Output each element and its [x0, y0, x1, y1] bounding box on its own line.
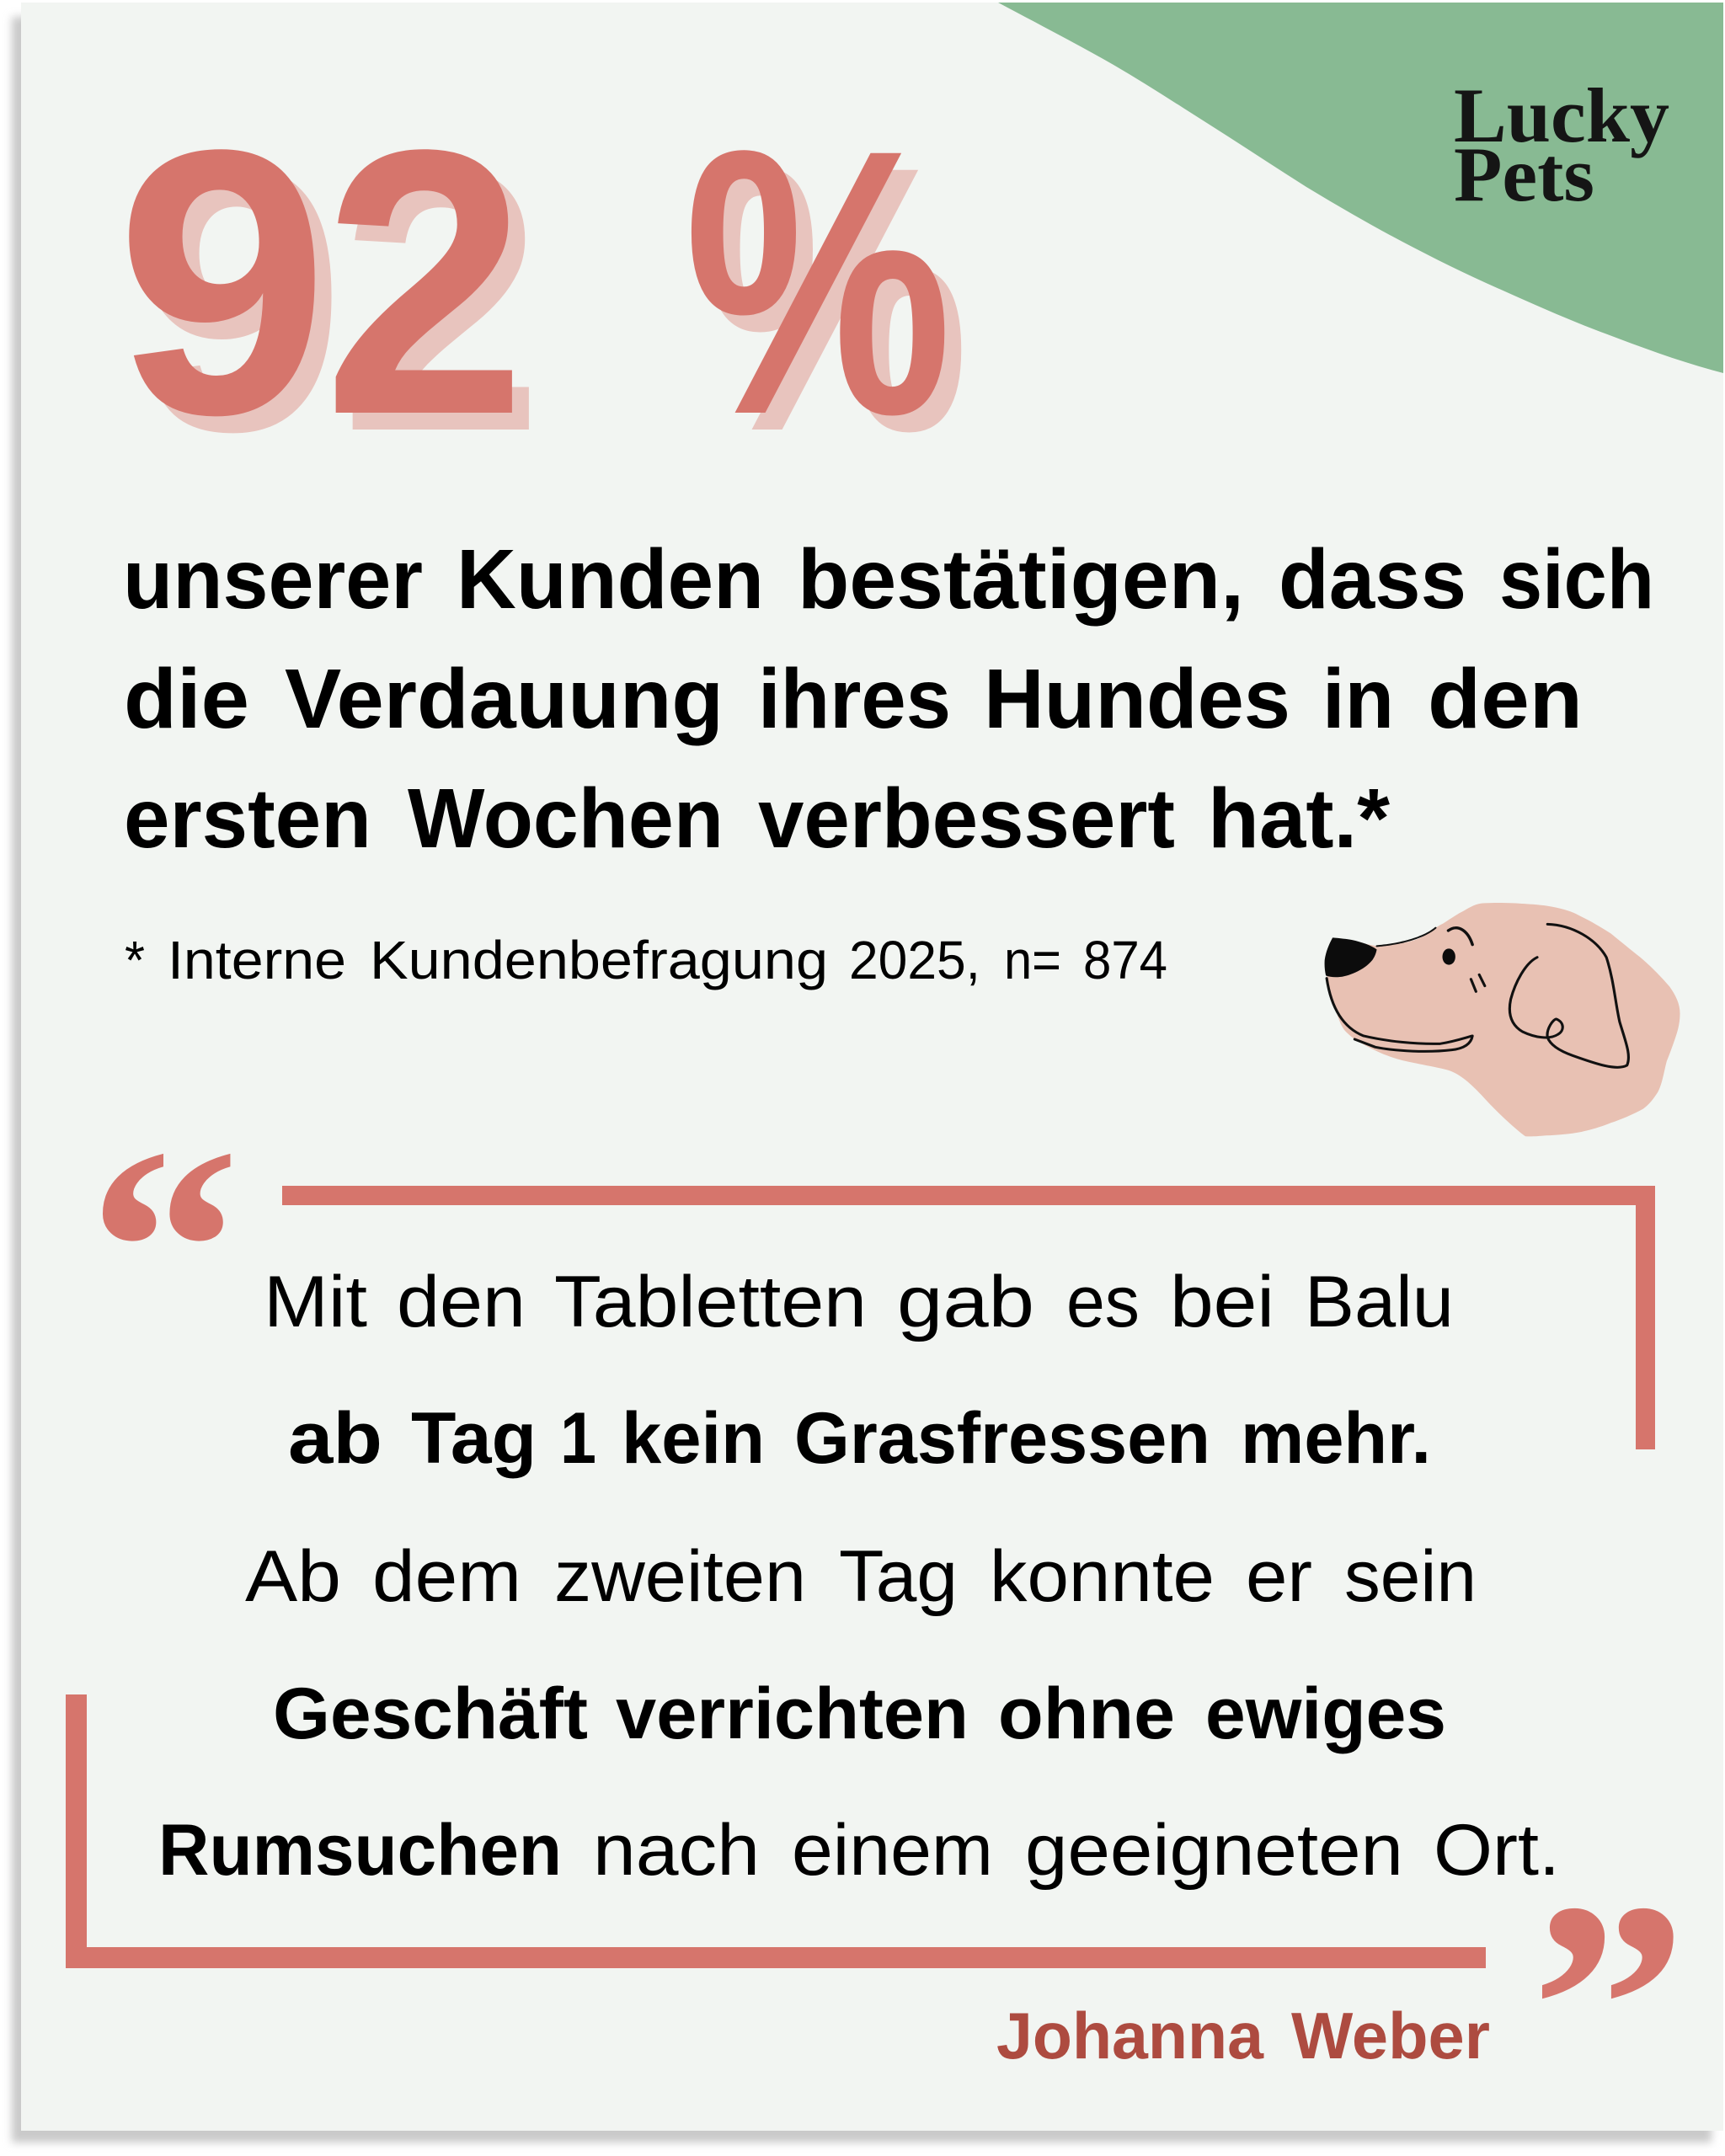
- testimonial quote text: geeigneten: [1025, 1810, 1403, 1891]
- headline statement: [123, 532, 1654, 866]
- testimonial quote text: er: [1246, 1536, 1312, 1617]
- testimonial quote text: Grasfressen: [794, 1398, 1210, 1479]
- dog nose: [1325, 937, 1377, 977]
- logo: Lucky Pets: Lucky: [1454, 72, 1669, 158]
- testimonial quote text: ab: [288, 1398, 382, 1479]
- footnote: *: [125, 930, 145, 990]
- testimonial quote text: bei: [1170, 1262, 1274, 1342]
- headline statement: ihres: [758, 652, 951, 746]
- testimonial quote text: Ab: [245, 1536, 341, 1617]
- testimonial quote text: kein: [622, 1398, 765, 1479]
- testimonial quote text: Tag: [839, 1536, 958, 1617]
- big number: 92 %: 9: [133, 88, 345, 510]
- headline statement: verbessert: [758, 771, 1175, 866]
- headline statement: hat.*: [1208, 771, 1390, 866]
- opening quotation mark: “: [88, 1089, 240, 1409]
- big number: 92 %: %: [701, 88, 969, 510]
- testimonial quote text: den: [397, 1262, 526, 1342]
- big number: 92 %: 2: [340, 88, 543, 510]
- headline statement: den: [1428, 652, 1583, 746]
- headline statement: ersten: [124, 771, 371, 866]
- headline statement: Kunden: [457, 532, 764, 627]
- testimonial quote text: zweiten: [554, 1536, 806, 1617]
- headline statement: sich: [1499, 532, 1654, 627]
- green corner shape: [998, 3, 1723, 373]
- testimonial quote text: ewiges: [1205, 1673, 1446, 1754]
- quote frame: top right bracket: [282, 1186, 1655, 1449]
- quote frame: bottom left bracket: [66, 1694, 1486, 1968]
- testimonial quote text: [158, 1262, 1560, 1891]
- dog line work: [1327, 924, 1628, 1067]
- big number: 92 %: %: [684, 72, 953, 493]
- logo: Lucky Pets: Pets: [1454, 131, 1594, 217]
- headline statement: unserer: [123, 532, 423, 627]
- testimonial quote text: dem: [372, 1536, 521, 1617]
- headline statement: Wochen: [408, 771, 724, 866]
- testimonial quote text: verrichten: [616, 1673, 969, 1754]
- testimonial quote text: Tabletten: [554, 1262, 867, 1342]
- big number: 92 %: 9: [116, 71, 328, 493]
- headline statement: dass: [1279, 532, 1466, 627]
- testimonial quote text: Ort.: [1434, 1810, 1560, 1891]
- dog eye: [1442, 948, 1455, 965]
- footnote: Interne: [168, 930, 346, 990]
- testimonial quote text: Tag: [411, 1398, 537, 1479]
- logo: Lucky Pets: [1454, 72, 1669, 217]
- testimonial quote text: Mit: [264, 1262, 367, 1342]
- footnote: 2025,: [849, 930, 980, 990]
- quote author: Johanna: [996, 1999, 1264, 2073]
- footnote: Kundenbefragung: [370, 930, 828, 990]
- testimonial quote text: Rumsuchen: [158, 1810, 562, 1891]
- testimonial quote text: konnte: [990, 1536, 1215, 1617]
- testimonial quote text: mehr.: [1241, 1398, 1431, 1479]
- quote author: Weber: [1291, 1999, 1490, 2073]
- testimonial quote text: Balu: [1305, 1262, 1454, 1342]
- footnote: [125, 930, 1167, 990]
- testimonial quote text: gab: [897, 1262, 1034, 1342]
- testimonial quote text: sein: [1344, 1536, 1477, 1617]
- quote author: [996, 1999, 1490, 2073]
- headline statement: die: [124, 652, 249, 746]
- footnote: n=: [1004, 930, 1061, 990]
- testimonial quote text: nach: [593, 1810, 760, 1891]
- testimonial quote text: Geschäft: [273, 1673, 588, 1754]
- footnote: 874: [1083, 930, 1167, 990]
- headline statement: Verdauung: [285, 652, 724, 746]
- big number: 92 %: [116, 71, 969, 510]
- icon: dog head illustration: [1325, 903, 1680, 1136]
- headline statement: bestätigen,: [798, 532, 1244, 627]
- testimonial quote text: einem: [792, 1810, 993, 1891]
- testimonial quote text: ohne: [998, 1673, 1175, 1754]
- headline statement: in: [1322, 652, 1394, 746]
- testimonial quote text: es: [1066, 1262, 1140, 1342]
- big number: 92 %: 2: [323, 71, 526, 493]
- headline statement: Hundes: [984, 652, 1290, 746]
- testimonial quote text: 1: [560, 1398, 596, 1479]
